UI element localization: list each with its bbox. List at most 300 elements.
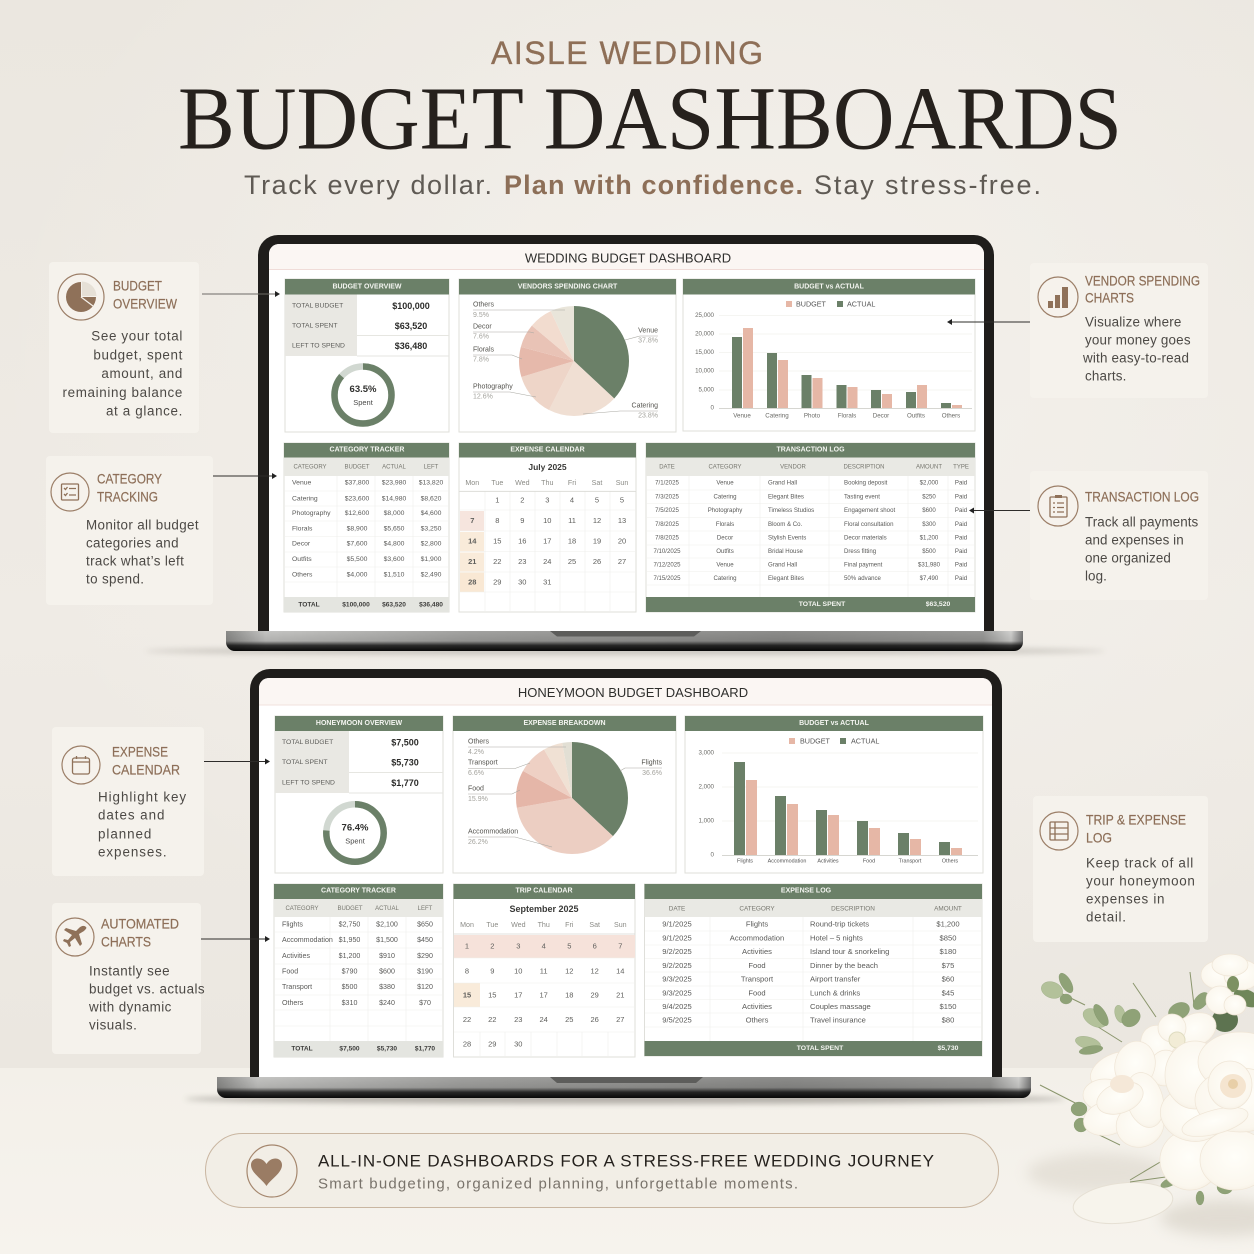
bar chart: 15,000 <box>695 349 715 356</box>
panel: category tracker: $650 <box>417 920 433 928</box>
bar chart: 0 <box>711 404 715 412</box>
panel: transaction log: Paid <box>955 534 967 542</box>
panel: expense log: Flights <box>746 920 768 928</box>
panel: transaction log: AMOUNT <box>916 464 942 470</box>
panel: trip calendar: 12 <box>565 966 573 976</box>
pie labels: 37.8% <box>638 338 658 344</box>
panel: transaction log: 50% advance <box>844 575 882 582</box>
panel: transaction log: Tasting event <box>844 494 880 500</box>
panel: category tracker: $450 <box>417 936 433 944</box>
donut: 63.5% spent: Spent <box>353 398 374 407</box>
callout: trip and expense log: your honeymoon <box>1086 874 1196 888</box>
panel: honeymoon overview: HONEYMOON OVERVIEW <box>316 720 402 727</box>
panel: category tracker: $600 <box>379 968 395 976</box>
panel: transaction log: Bridal House <box>768 548 803 555</box>
panel: transaction log: 7/1/2025 <box>655 480 679 486</box>
panel: category tracker: $1,200 <box>339 952 360 960</box>
panel: trip calendar: 4 <box>542 942 546 950</box>
callout: vendor spending charts: CHARTS <box>1085 290 1134 306</box>
panel: expense log: Travel insurance <box>810 1016 866 1024</box>
eyebrow: aisle wedding: AISLE WEDDING <box>491 35 763 71</box>
panel: honeymoon overview: LEFT TO SPEND <box>282 780 335 786</box>
panel: category tracker: $190 <box>417 968 433 976</box>
arrow: transaction log <box>969 508 1030 514</box>
panel: expense calendar: Mon <box>465 479 479 487</box>
panel: expense log: Hotel – 5 nights <box>810 934 863 942</box>
panel: expense calendar: 13 <box>618 516 626 525</box>
bar chart: 3,000 <box>699 750 715 756</box>
callout: transaction log: and expenses in <box>1085 532 1184 548</box>
laptop: wedding budget dashboard <box>145 235 1105 655</box>
pie labels: Flights <box>641 760 662 766</box>
panel: transaction log: $300 <box>922 521 936 528</box>
bar chart <box>699 750 978 864</box>
icon: heart <box>247 1145 297 1197</box>
panel: transaction log: Catering <box>713 575 737 582</box>
panel: trip calendar: 27 <box>616 1015 624 1024</box>
panel: trip calendar: 17 <box>540 990 548 1000</box>
panel: expense log: $180 <box>940 947 956 956</box>
panel: transaction log: $500 <box>922 548 936 555</box>
panel: category tracker: $1,770 <box>415 1046 435 1052</box>
panel: category tracker: Accommodation <box>282 936 333 944</box>
panel: category tracker: LEFT <box>418 906 433 912</box>
bar chart: 2,000 <box>699 784 715 790</box>
bar chart: Outfits <box>907 412 925 420</box>
panel: expense calendar: 27 <box>618 557 626 566</box>
panel: category tracker: ACTUAL <box>375 906 399 912</box>
panel: expense log: $1,200 <box>936 920 960 928</box>
panel: transaction log: Booking deposit <box>844 480 888 486</box>
panel: expense calendar: 3 <box>545 496 549 504</box>
bar chart: Food <box>863 858 875 864</box>
callout: category tracking <box>46 456 213 605</box>
panel: transaction log: 7/3/2025 <box>655 494 679 500</box>
panel: trip calendar: 7 <box>618 942 622 950</box>
laptop: honeymoon budget dashboard <box>185 669 1065 1104</box>
pie labels: 7.8% <box>473 356 489 364</box>
pie labels <box>468 738 662 847</box>
panel: expense breakdown <box>453 716 676 873</box>
panel: expense log: Accommodation <box>730 934 784 942</box>
pie labels: Others <box>468 738 490 746</box>
panel: category tracker: $5,650 <box>384 526 405 532</box>
panel: category tracker: Food <box>282 968 298 976</box>
panel: budget overview: BUDGET OVERVIEW <box>332 284 402 290</box>
callout: category tracking: Monitor all budget <box>86 518 199 532</box>
panel: category tracker <box>274 884 443 1057</box>
laptop base <box>226 631 1023 651</box>
icon: ledger <box>1040 812 1078 850</box>
panel: expense log: 9/2/2025 <box>662 961 692 970</box>
panel: transaction log: Catering <box>713 494 737 500</box>
panel: category tracker: $4,000 <box>347 572 368 578</box>
callout: vendor spending charts: Visualize where <box>1085 314 1182 330</box>
panel: honeymoon overview <box>275 716 443 873</box>
panel: trip calendar: 18 <box>565 990 573 1000</box>
legend: ACTUAL <box>851 736 879 746</box>
panel: trip calendar: 22 <box>488 1015 496 1024</box>
panel: transaction log: Stylish Events <box>768 534 806 542</box>
panel: category tracker: $240 <box>379 999 395 1007</box>
flower: top bloom <box>1201 954 1254 1015</box>
panel: category tracker: $5,730 <box>377 1046 397 1052</box>
pie labels: Others <box>473 302 495 308</box>
callout: trip and expense log: Keep track of all <box>1086 856 1194 870</box>
donut: 76.4% spent <box>326 804 384 862</box>
main title: BUDGET DASHBOARDS <box>178 70 1122 168</box>
panel: transaction log: CATEGORY <box>708 464 742 470</box>
panel: category tracker: Venue <box>292 480 311 486</box>
panel: expense log: $45 <box>942 988 954 998</box>
panel: transaction log: Decor <box>717 534 733 542</box>
panel: transaction log: Photography <box>708 507 743 514</box>
panel: category tracker: BUDGET <box>344 464 370 470</box>
panel: transaction log: Elegant Bites <box>768 575 804 582</box>
panel: expense log: Activities <box>742 1002 772 1011</box>
bar chart: Flights <box>737 858 753 864</box>
arrow: expense calendar <box>204 758 270 764</box>
banner: all-in-one dashboards: ALL-IN-ONE DASHBOARDS FOR A STRESS-FREE WEDDING JOURNEY <box>318 1152 934 1170</box>
panel: transaction log: Decor materials <box>844 534 887 542</box>
panel: budget overview: $100,000 <box>392 301 430 311</box>
flower: middle blossom <box>1135 1006 1222 1090</box>
panel: expense calendar: 8 <box>495 516 499 525</box>
panel: expense calendar: 21 <box>468 557 476 566</box>
panel: expense calendar: 31 <box>543 578 551 586</box>
panel: category tracker: CATEGORY <box>285 906 319 912</box>
panel: category tracker: $70 <box>419 999 431 1007</box>
panel: trip calendar: Fri <box>565 921 574 929</box>
callout: automated charts: visuals. <box>89 1018 137 1032</box>
dashboard title: WEDDING BUDGET DASHBOARD <box>525 250 731 266</box>
panel: category tracker: $120 <box>417 983 433 991</box>
panel: expense calendar: 17 <box>543 536 551 546</box>
callout: transaction log <box>1030 471 1208 600</box>
panel: category tracker: CATEGORY TRACKER <box>330 446 404 454</box>
panel: category tracker: Activities <box>282 952 310 960</box>
callout: budget overview: BUDGET <box>113 278 162 294</box>
callout: expense calendar: expenses. <box>98 844 168 860</box>
panel: honeymoon overview: $7,500 <box>391 738 419 748</box>
panel: expense calendar: 29 <box>493 578 501 586</box>
callout: budget overview <box>49 262 199 433</box>
callout: trip and expense log: TRIP & EXPENSE <box>1086 812 1186 828</box>
callout: category tracking: categories and <box>86 536 179 550</box>
bar chart <box>695 312 972 420</box>
panel: expense log: 9/1/2025 <box>662 934 692 942</box>
panel: category tracker: $8,900 <box>347 526 368 532</box>
panel: category tracker: CATEGORY <box>293 464 327 470</box>
panel: transaction log: Florals <box>716 521 734 528</box>
panel: category tracker: $4,800 <box>384 540 405 548</box>
bar chart: 5,000 <box>699 386 715 394</box>
pie chart <box>544 770 600 826</box>
panel: transaction log: Timeless Studios <box>768 507 814 514</box>
bar chart: Accommodation <box>768 858 806 864</box>
panel: transaction log: VENDOR <box>780 464 807 470</box>
panel: trip calendar: 12 <box>591 966 599 976</box>
floral arrangement <box>1027 954 1254 1236</box>
panel: transaction log: 7/8/2025 <box>655 521 679 528</box>
callout: transaction log: one organized <box>1085 550 1171 566</box>
panel: trip calendar: 1 <box>465 942 469 950</box>
pie labels: Venue <box>638 328 658 334</box>
panel: expense calendar: 14 <box>468 536 477 546</box>
panel: transaction log: Dress fitting <box>844 548 876 555</box>
panel: honeymoon overview: $5,730 <box>391 758 419 768</box>
panel: budget overview: TOTAL SPENT <box>292 322 338 330</box>
panel: trip calendar: 6 <box>593 942 597 950</box>
panel: expense calendar: EXPENSE CALENDAR <box>510 446 585 454</box>
callout: budget overview: budget, spent <box>93 348 183 362</box>
panel: category tracker <box>284 443 449 612</box>
panel: category tracker: $7,500 <box>339 1046 360 1052</box>
pie labels: 23.8% <box>638 412 658 420</box>
panel: category tracker: $37,800 <box>345 480 369 486</box>
panel: expense calendar: 30 <box>518 578 526 586</box>
bar chart: 0 <box>711 852 715 858</box>
panel: category tracker: $2,750 <box>339 920 360 928</box>
callout: vendor spending charts: with easy-to-read <box>1082 350 1189 366</box>
callout: expense calendar: dates and <box>98 808 165 822</box>
panel: expense calendar: Fri <box>568 479 577 487</box>
panel: category tracker: $1,500 <box>376 936 398 944</box>
panel: trip calendar: Tue <box>486 921 498 929</box>
panel: expense calendar: Wed <box>515 479 530 487</box>
callout: expense calendar: Highlight key <box>98 790 187 804</box>
panel: expense log: $75 <box>942 961 954 970</box>
donut: 76.4% spent: Spent <box>345 836 366 846</box>
panel: expense calendar: 1 <box>495 496 499 504</box>
arrow: category tracking <box>213 473 277 479</box>
panel: expense calendar: 5 <box>620 496 624 504</box>
subtitle: Track every dollar. <box>244 170 492 200</box>
panel: transaction log: Paid <box>955 521 967 528</box>
callout: budget overview: amount, and <box>101 366 183 381</box>
panel: trip calendar: 14 <box>616 966 624 976</box>
panel: category tracker: $36,480 <box>419 602 443 608</box>
panel: expense log: 9/4/2025 <box>662 1002 692 1011</box>
arrow: automated charts <box>201 936 270 942</box>
panel: transaction log: DESCRIPTION <box>843 464 885 470</box>
icon: pie chart <box>58 274 104 320</box>
panel: expense log: Lunch & drinks <box>810 988 860 998</box>
panel: trip calendar: 21 <box>616 990 624 1000</box>
panel: expense calendar: 20 <box>618 536 626 546</box>
panel: trip calendar: 29 <box>591 990 599 1000</box>
panel: transaction log: $250 <box>922 494 936 500</box>
panel: vendors spending chart <box>459 279 676 432</box>
panel: transaction log: Paid <box>955 494 967 500</box>
panel: category tracker: BUDGET <box>337 906 363 912</box>
pie labels: 4.2% <box>468 749 484 756</box>
panel: expense log: CATEGORY <box>739 906 775 912</box>
panel: expense log <box>644 884 982 1056</box>
panel: expense calendar: 4 <box>570 496 574 504</box>
panel: expense calendar: 23 <box>518 557 526 566</box>
pie labels: 15.9% <box>468 796 488 803</box>
panel: trip calendar: Mon <box>460 921 474 929</box>
panel: transaction log: 7/5/2025 <box>655 507 679 514</box>
panel: category tracker: LEFT <box>424 464 439 470</box>
panel: transaction log: $1,200 <box>920 534 939 542</box>
panel: trip calendar: 28 <box>463 1040 471 1048</box>
panel: transaction log: Paid <box>955 548 967 555</box>
pie labels: Transport <box>468 760 498 766</box>
callout: expense calendar: CALENDAR <box>112 762 180 778</box>
bar chart: 1,000 <box>699 818 715 824</box>
panel: budget overview: LEFT TO SPEND <box>292 342 345 350</box>
legend: BUDGET <box>796 300 827 308</box>
panel: transaction log: Paid <box>955 562 967 568</box>
callout: trip and expense log: LOG <box>1086 830 1112 846</box>
flower: large right rose <box>1152 1032 1254 1198</box>
callout: trip and expense log: expenses in <box>1086 892 1165 906</box>
panel: expense log: 9/2/2025 <box>662 947 692 956</box>
icon: bar chart <box>1038 277 1078 317</box>
panel: category tracker: $3,600 <box>384 556 405 563</box>
panel: expense log: Transport <box>741 974 774 984</box>
panel: category tracker: $12,600 <box>345 510 369 517</box>
icon: clipboard <box>1038 486 1078 526</box>
panel: transaction log: 7/15/2025 <box>653 575 681 582</box>
donut: 63.5% spent: 63.5% <box>350 384 377 395</box>
bar chart: Catering <box>765 412 789 420</box>
callout: budget overview: remaining balance <box>63 385 183 400</box>
callout: automated charts <box>52 903 205 1054</box>
panel: expense calendar: 10 <box>543 516 551 525</box>
panel: category tracker: Catering <box>292 496 318 502</box>
panel: expense log: EXPENSE LOG <box>781 888 832 894</box>
panel: expense calendar: 7 <box>470 516 474 525</box>
panel: expense breakdown: EXPENSE BREAKDOWN <box>523 720 606 727</box>
callout: automated charts: Instantly see <box>89 964 170 978</box>
bar chart: Activities <box>817 858 839 864</box>
panel: category tracker: $14,980 <box>382 496 406 502</box>
panel: expense log: TOTAL SPENT <box>797 1045 844 1052</box>
panel: expense calendar: 19 <box>593 536 601 546</box>
panel: category tracker: $8,620 <box>421 496 442 502</box>
panel: category tracker: Flights <box>282 920 303 928</box>
panel: expense log: 9/1/2025 <box>662 920 692 928</box>
panel: category tracker: $1,950 <box>339 936 360 944</box>
panel: budget vs actual <box>683 279 975 431</box>
panel: category tracker: $2,490 <box>421 572 442 578</box>
callout: category tracking: to spend. <box>86 572 144 586</box>
title block <box>178 35 1122 200</box>
callout: transaction log: TRANSACTION LOG <box>1085 490 1199 504</box>
panel: trip calendar: 15 <box>488 990 496 1000</box>
panel: category tracker: $23,980 <box>382 480 406 486</box>
panel: category tracker: $8,000 <box>384 510 405 517</box>
panel: expense log: Food <box>748 988 766 998</box>
legend: BUDGET <box>800 736 831 746</box>
callout: category tracking: TRACKING <box>97 490 158 504</box>
panel: transaction log: Grand Hall <box>768 562 797 568</box>
panel: expense log: Island tour & snorkeling <box>810 947 889 956</box>
panel: category tracker: TOTAL <box>291 1046 313 1052</box>
panel: trip calendar: Sun <box>614 921 627 929</box>
bar chart: Photo <box>804 412 821 420</box>
panel: category tracker: Outfits <box>292 556 312 563</box>
panel: trip calendar: 10 <box>514 966 522 976</box>
pie labels: 6.6% <box>468 770 484 777</box>
panel: category tracker: $2,800 <box>421 540 442 548</box>
bar chart: Venue <box>733 412 751 420</box>
panel: expense calendar: 5 <box>595 496 599 504</box>
pie labels: 9.5% <box>473 312 489 319</box>
icon: airplane <box>56 918 94 956</box>
dashboard title: HONEYMOON BUDGET DASHBOARD <box>518 685 748 700</box>
panel: transaction log: $63,520 <box>926 601 950 608</box>
panel: transaction log: Venue <box>716 562 734 568</box>
icon: calendar <box>62 746 100 784</box>
pie labels: Photography <box>473 384 513 390</box>
banner: all-in-one dashboards <box>206 1134 998 1208</box>
panel: category tracker: $2,100 <box>376 920 398 928</box>
panel: trip calendar: 29 <box>488 1040 496 1048</box>
panel: category tracker: ACTUAL <box>382 464 406 470</box>
panel: category tracker: Decor <box>292 540 311 548</box>
bar chart: Others <box>942 858 958 864</box>
panel: expense log: $5,730 <box>938 1045 959 1052</box>
panel: category tracker: $7,600 <box>347 540 368 548</box>
laptop base <box>217 1077 1031 1098</box>
bar chart: 10,000 <box>695 368 715 374</box>
panel: budget overview: $36,480 <box>395 341 427 351</box>
panel: transaction log: Paid <box>955 480 967 486</box>
panel: category tracker: $5,500 <box>347 556 368 563</box>
panel: expense log: 9/5/2025 <box>662 1016 692 1024</box>
panel: expense calendar: Thu <box>541 479 553 487</box>
panel: trip calendar: Wed <box>511 921 526 929</box>
pie labels: 26.2% <box>468 839 488 846</box>
panel: expense calendar: 11 <box>568 516 576 525</box>
callout: automated charts: budget vs. actuals <box>89 982 205 996</box>
callout: automated charts: CHARTS <box>101 934 151 950</box>
panel: trip calendar: 17 <box>514 990 522 1000</box>
panel: category tracker: $100,000 <box>342 602 370 608</box>
panel: honeymoon overview: $1,770 <box>391 778 419 788</box>
callout: vendor spending charts <box>1030 263 1208 398</box>
pie labels: 36.6% <box>642 770 662 777</box>
panel: category tracker: $310 <box>342 999 357 1007</box>
callout: trip and expense log: detail. <box>1086 910 1127 924</box>
panel: trip calendar <box>454 884 635 1057</box>
panel: expense log: $850 <box>940 934 956 942</box>
callout: expense calendar <box>52 727 204 876</box>
panel: category tracker: $4,600 <box>421 510 442 517</box>
panel: trip calendar: 15 <box>463 990 471 1000</box>
panel: expense log: Airport transfer <box>810 974 861 984</box>
panel: expense calendar: 22 <box>493 557 501 566</box>
panel: category tracker: Florals <box>292 526 313 532</box>
panel: trip calendar: Sat <box>589 921 600 929</box>
panel: category tracker: $790 <box>342 968 357 976</box>
panel: expense calendar: 2 <box>520 496 524 504</box>
panel: transaction log: TRANSACTION LOG <box>776 446 845 454</box>
panel: expense calendar: 9 <box>520 516 524 525</box>
callout: automated charts: with dynamic <box>88 1000 172 1014</box>
pie labels: Florals <box>473 346 495 354</box>
flower: left rose <box>1079 1037 1170 1154</box>
callout: transaction log: Track all payments <box>1085 514 1199 530</box>
panel: budget vs actual <box>685 716 983 873</box>
panel: expense calendar: 16 <box>518 536 526 546</box>
legend: ACTUAL <box>847 300 875 308</box>
panel: expense log: DATE <box>669 906 685 912</box>
